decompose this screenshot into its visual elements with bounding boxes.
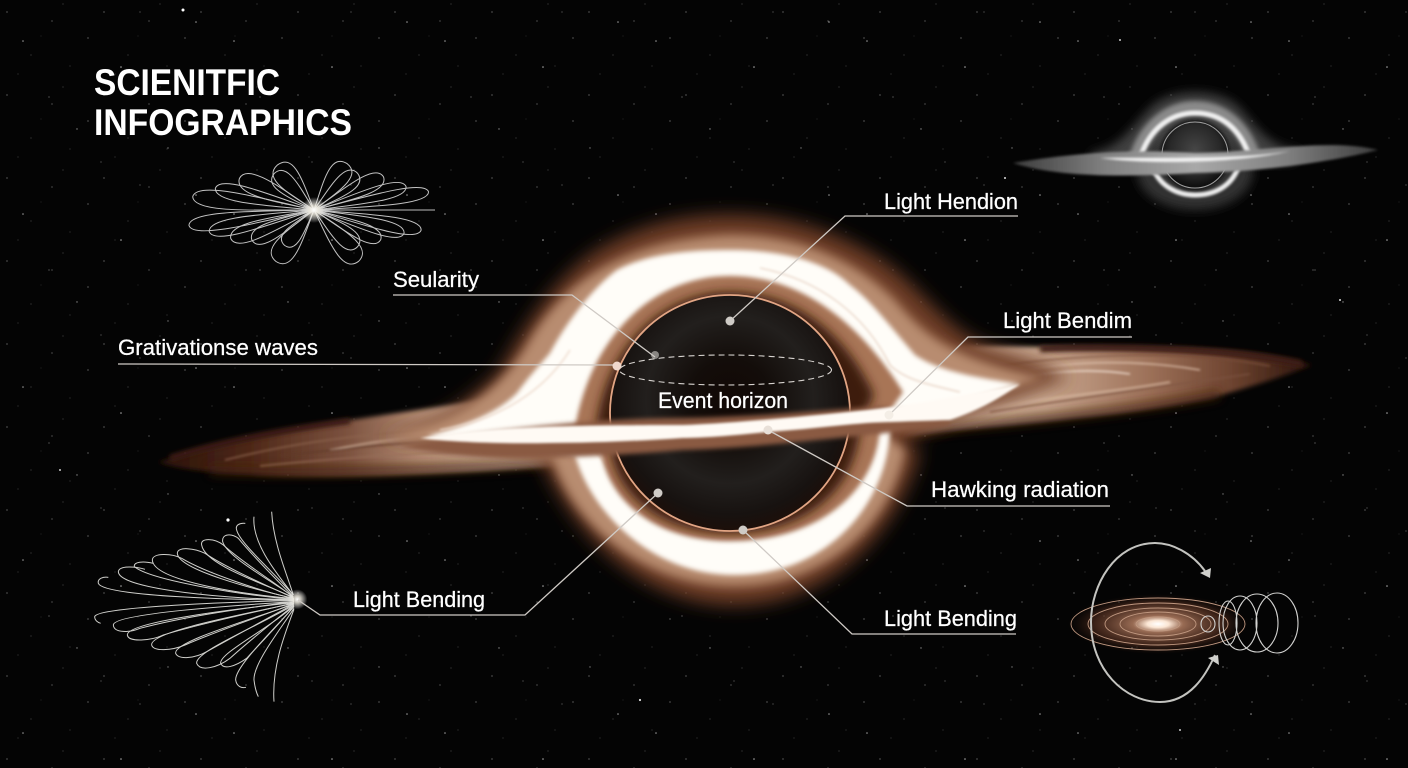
label: Seularity: Seularity [393, 267, 479, 292]
accretion disc white band [420, 384, 1020, 443]
label: Hawking radiation [764, 426, 1110, 506]
label: Hawking radiation: Hawking radiation [931, 477, 1109, 502]
title: SCIENITFIC [94, 62, 280, 103]
label: Light Bendim: Light Bendim [1003, 308, 1132, 333]
band fringe over the hole [400, 406, 950, 458]
label: Seularity [393, 267, 659, 359]
lensed ring white core [427, 250, 1020, 575]
label: Light Bending right [738, 526, 1017, 634]
icon: orbit rings with arrows [1068, 543, 1298, 702]
dashed orbit ellipse [620, 355, 832, 385]
label: Light Hendion [726, 189, 1018, 326]
photon ring [610, 295, 850, 531]
label: Gravitational waves [118, 335, 622, 370]
label: Event horizon: Event horizon [658, 388, 788, 413]
dark fringe around the hole [596, 292, 874, 533]
accretion disc outer [158, 345, 1312, 476]
icon: small monochrome black hole [1013, 92, 1378, 210]
label: Gravitational waves: Grativationse waves [118, 335, 318, 360]
label: Light Hendion: Light Hendion [884, 189, 1018, 214]
title [94, 62, 352, 143]
tan fringe around the hole [575, 276, 903, 541]
halo glow around lensed ring [380, 215, 1070, 605]
icon: gravitational wave flower diagram [188, 157, 435, 269]
label: Light Bending left [298, 488, 662, 615]
lensed ring mid glow [385, 235, 1045, 586]
icon: light-bending fan diagram [95, 512, 307, 702]
event horizon disc [610, 295, 850, 531]
lensed ring strands [440, 268, 960, 505]
label: Light Bending right: Light Bending [884, 606, 1017, 631]
main black hole [158, 215, 1312, 605]
title: INFOGRAPHICS [94, 102, 352, 143]
disc ring streaks [225, 355, 1270, 466]
label: Light Bending left: Light Bending [353, 587, 485, 612]
label: Light Bendim [884, 308, 1132, 420]
